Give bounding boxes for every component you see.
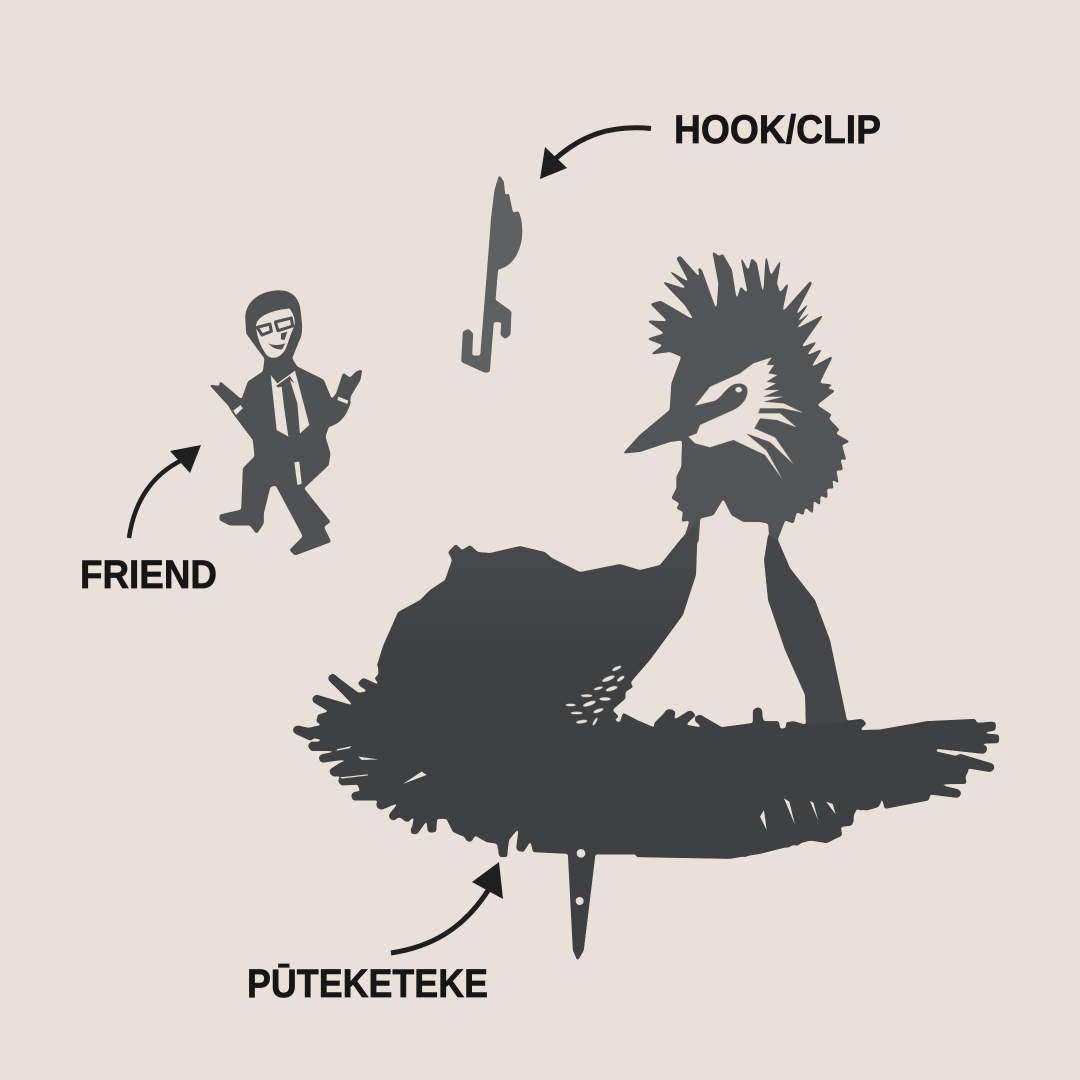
bird head with crest xyxy=(623,252,849,542)
arrow: to friend xyxy=(129,445,201,538)
icon: hook/clip silhouette xyxy=(462,176,522,372)
bird body and neck edge xyxy=(378,520,698,730)
arrow: to hook/clip xyxy=(540,128,651,179)
bird silhouette xyxy=(294,252,998,960)
nest slivers, feather spots and stake holes xyxy=(337,665,625,905)
label: pūteketeke: PŪTEKETEKE xyxy=(247,962,488,1006)
nest gaps xyxy=(760,798,836,830)
label: hook/clip: HOOK/CLIP xyxy=(674,108,881,152)
nest left with stake xyxy=(294,660,652,960)
icon: friend figure xyxy=(210,291,362,555)
bird cut-outs xyxy=(337,357,836,905)
neck back strip xyxy=(764,535,849,730)
label: friend: FRIEND xyxy=(80,553,217,597)
arrow: to pūteketeke xyxy=(391,862,503,953)
nest right xyxy=(637,708,998,858)
head cut-outs: face patch and eye xyxy=(688,357,803,479)
right nest twigs xyxy=(658,712,995,853)
icon: pūteketeke bird sculpture xyxy=(80,108,998,1006)
left nest twigs xyxy=(297,678,528,853)
